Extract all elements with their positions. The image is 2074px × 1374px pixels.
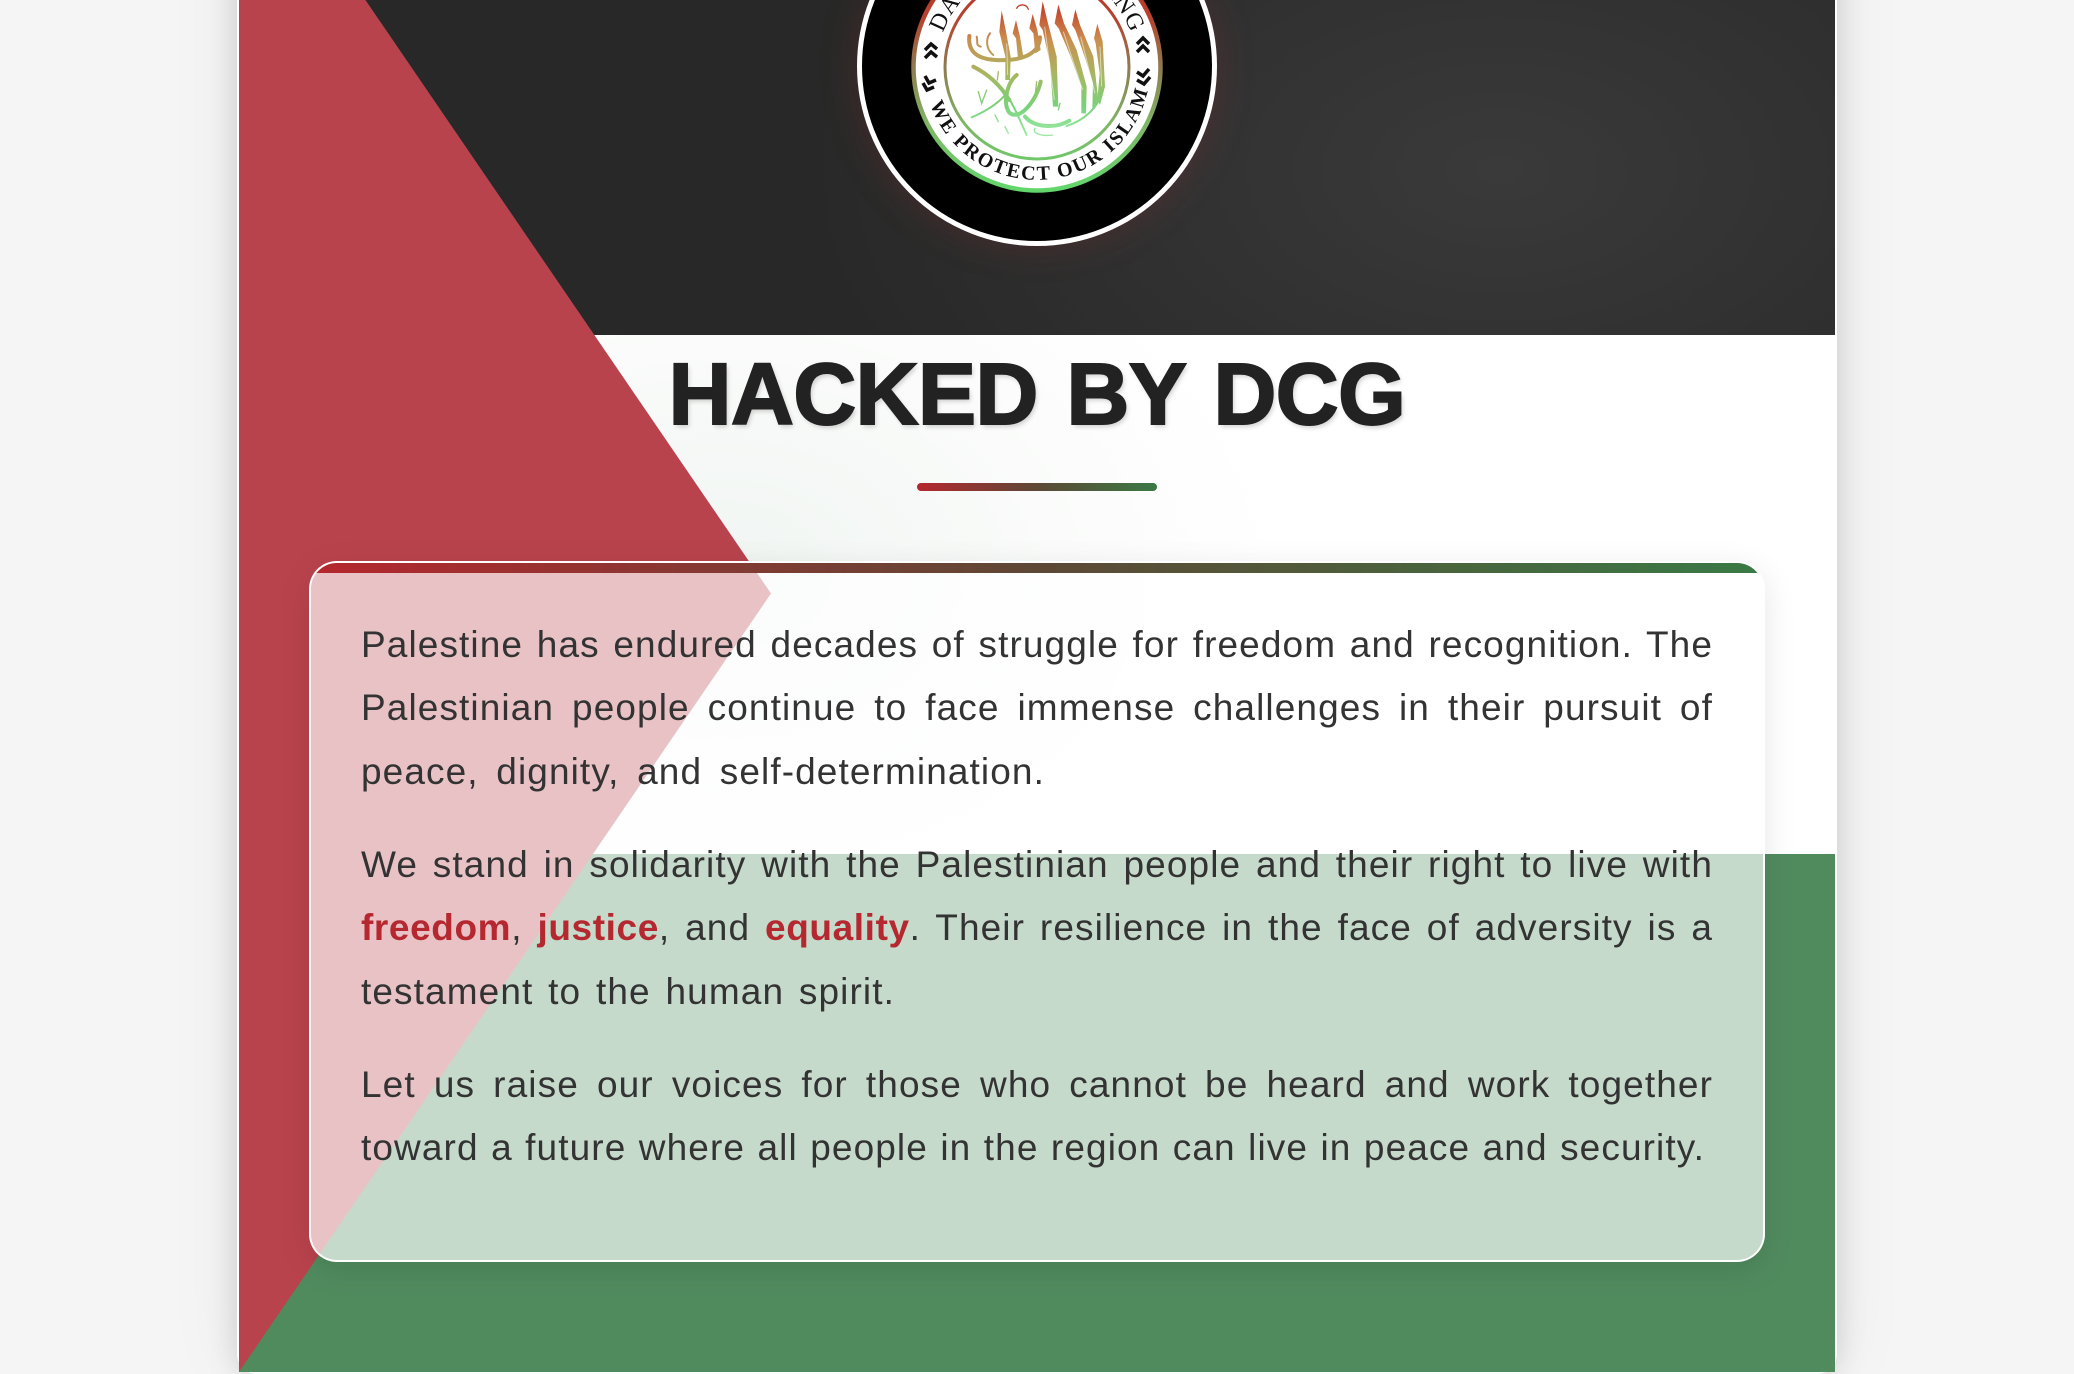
title underline	[917, 483, 1157, 491]
paragraph 3: toward a future where all people in the region can live in peace and security.	[361, 1127, 1705, 1168]
seal chevrons	[923, 38, 1150, 90]
paragraph 2: testament to the human spirit.	[361, 971, 895, 1012]
card top gradient bar	[316, 563, 1758, 573]
calligraphy	[969, 1, 1105, 135]
flag triangle: red	[239, 0, 771, 1372]
paragraph 1: Palestine has endured decades of struggle for freedom and recognition. The	[361, 624, 1713, 665]
paragraph 3	[361, 1064, 1713, 1168]
flag stripe: green	[239, 854, 1835, 1372]
paragraph 3: Let us raise our voices for those who cannot be heard and work together	[361, 1064, 1713, 1105]
paragraph 1	[361, 624, 1713, 792]
paragraph 2: We stand in solidarity with the Palestinian people and their right to live with	[361, 844, 1713, 885]
panel: message card	[309, 561, 1765, 1262]
paragraph 2	[361, 844, 1713, 1012]
flag stripe: black	[239, 0, 1835, 335]
flag stripe: white	[239, 335, 1835, 854]
paragraph 2: freedom, justice, and equality. Their resilience in the face of adversity is a	[361, 907, 1713, 948]
title: HACKED BY DCG	[669, 346, 1405, 443]
seal text: bottom arc: WE PROTECT OUR ISLAM	[932, 88, 1148, 180]
panel: poster frame with shadow	[237, 0, 1837, 1374]
paragraph 1: Palestinian people continue to face immense challenges in their pursuit of	[361, 687, 1713, 728]
paragraph 1: peace, dignity, and self-determination.	[361, 751, 1045, 792]
logo: circular DCG emblem	[848, 0, 1224, 255]
outer black disk with white ring	[860, 0, 1214, 244]
emblem seal	[911, 0, 1163, 193]
